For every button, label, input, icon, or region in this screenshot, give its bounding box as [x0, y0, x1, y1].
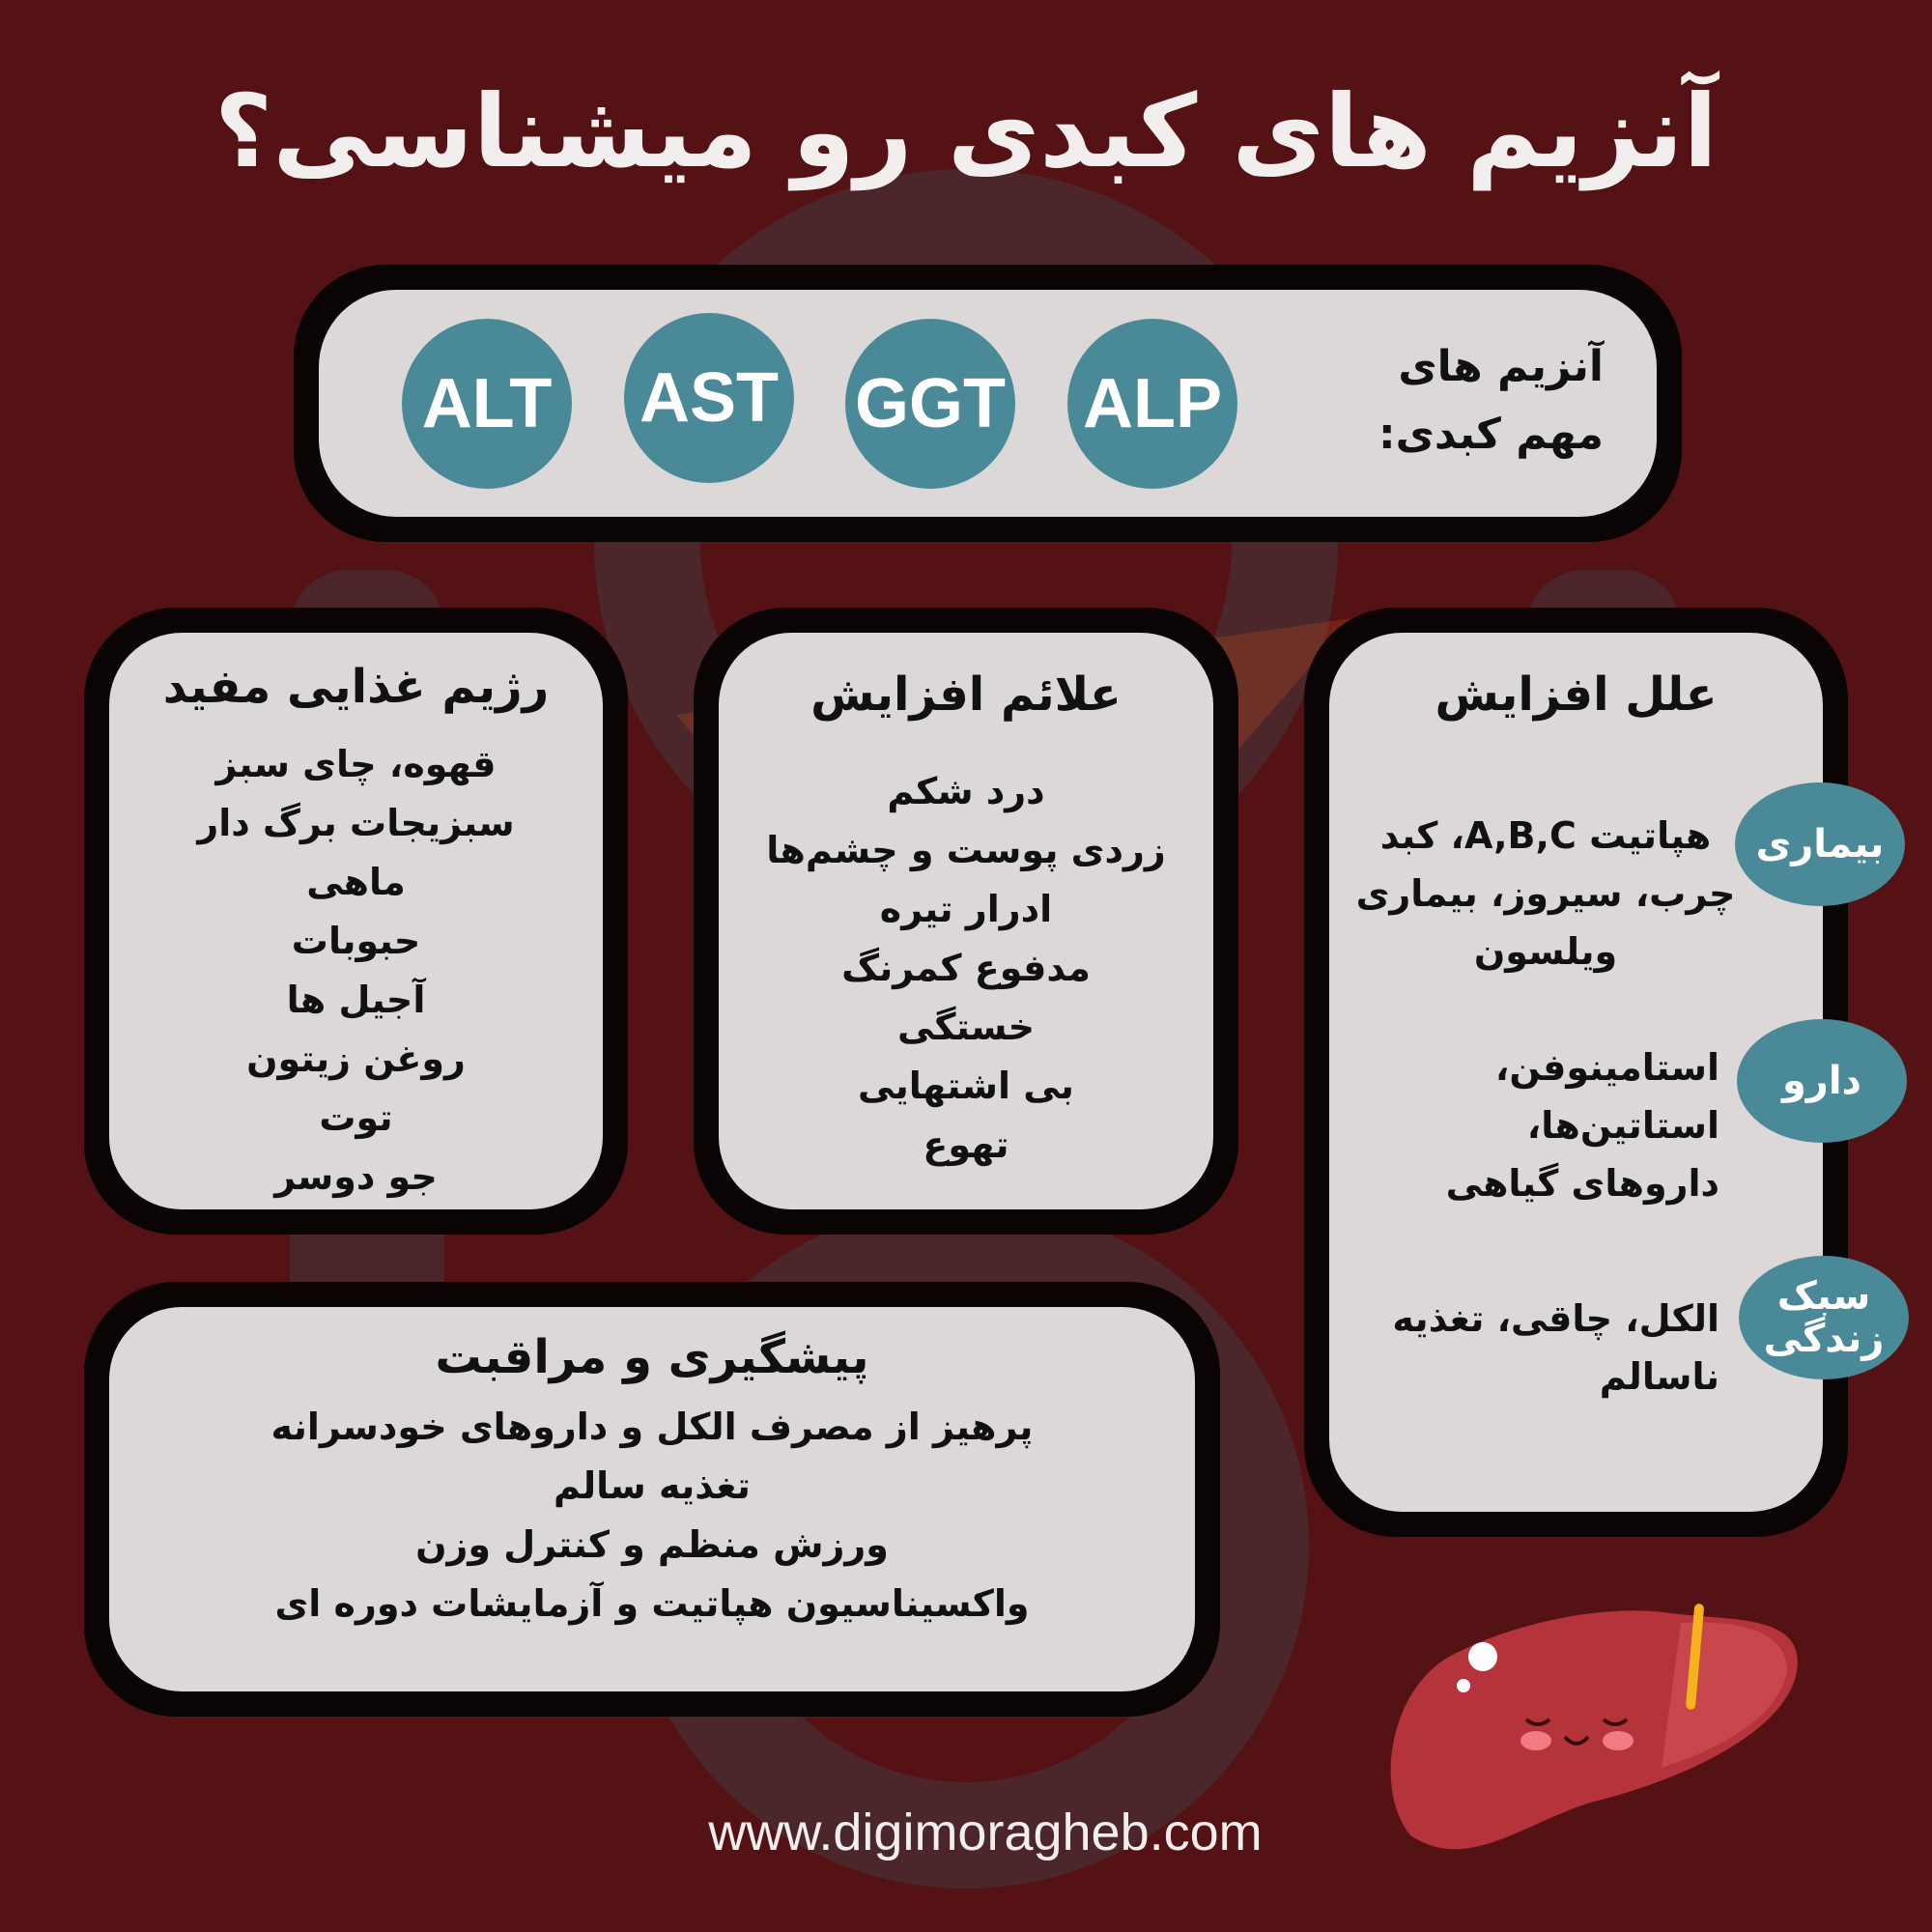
list: symptoms: تهوع: [923, 1123, 1009, 1166]
list: diet items: سبزیجات برگ دار: [197, 802, 515, 844]
circle: ALP: [1067, 319, 1237, 489]
list: diet items: حبوبات: [292, 920, 420, 962]
list: diet items: توت: [319, 1096, 393, 1139]
label: important enzymes: آنزیم های: [1398, 342, 1604, 391]
pill: drug: دارو: [1782, 1059, 1861, 1103]
website url: www.digimoragheb.com: [708, 1804, 1263, 1861]
list: diet items: [195, 743, 515, 1198]
panel: healthy diet: [84, 608, 628, 1235]
text: disease causes: [1356, 814, 1735, 974]
circle: AST: [624, 313, 794, 483]
pill: drug: [1737, 1019, 1907, 1143]
circle: GGT: [845, 319, 1015, 489]
heading: causes: علل افزایش: [1435, 668, 1718, 722]
circle: ALT: ALT: [422, 365, 552, 442]
text: lifestyle causes: [1392, 1297, 1719, 1399]
pill: disease: [1735, 782, 1905, 906]
panel: prevention: [84, 1282, 1220, 1717]
panel: key enzymes: [294, 265, 1682, 542]
list: diet items: قهوه، چای سبز: [215, 743, 497, 785]
heading: diet: رژیم غذایی مفید: [163, 660, 549, 714]
circle: ALT: [402, 319, 572, 489]
list: prevention items: ورزش منظم و کنترل وزن: [415, 1523, 889, 1566]
icon: liver mascot: [1391, 1604, 1798, 1849]
text: disease causes: ویلسون: [1474, 930, 1617, 973]
title: آنزیم های کبدی رو میشناسی؟: [214, 72, 1718, 190]
text: lifestyle causes: الکل، چاقی، تغذیه: [1392, 1297, 1719, 1340]
label: important enzymes: مهم کبدی:: [1378, 410, 1604, 459]
text: drug causes: استاتین‌ها،: [1527, 1104, 1719, 1147]
pill: lifestyle: [1739, 1256, 1909, 1379]
pill: disease: بیماری: [1756, 822, 1884, 867]
list: diet items: آجیل ها: [287, 979, 425, 1021]
pill: lifestyle: سبک: [1777, 1274, 1870, 1319]
pill: lifestyle: زندگی: [1764, 1317, 1884, 1361]
label: important enzymes: [1378, 340, 1605, 459]
list: symptoms: [766, 770, 1166, 1167]
heading: prevention: پیشگیری و مراقبت: [436, 1330, 868, 1384]
text: drug causes: [1446, 1046, 1719, 1206]
text: drug causes: داروهای گیاهی: [1446, 1162, 1719, 1205]
list: prevention items: پرهیز از مصرف الکل و داروهای خودسرانه: [271, 1406, 1033, 1448]
list: prevention items: واکسیناسیون هپاتیت و آزمایشات دوره ای: [274, 1582, 1030, 1625]
list: symptoms: مدفوع کمرنگ: [841, 947, 1091, 989]
circle: GGT: GGT: [855, 365, 1006, 442]
text: drug causes: استامینوفن،: [1495, 1046, 1719, 1089]
heading: symptoms: علائم افزایش: [810, 668, 1122, 722]
circle: AST: AST: [639, 359, 779, 437]
list: diet items: ماهی: [306, 861, 406, 903]
panel: causes: [1304, 608, 1848, 1537]
list: symptoms: زردی پوست و چشم‌ها: [766, 829, 1166, 871]
text: lifestyle causes: ناسالم: [1600, 1355, 1719, 1398]
circle: ALP: ALP: [1083, 365, 1222, 442]
list: symptoms: ادرار تیره: [880, 888, 1052, 930]
panel: symptoms: [694, 608, 1238, 1235]
list: symptoms: خستگی: [897, 1006, 1035, 1048]
list: symptoms: درد شکم: [887, 770, 1045, 812]
list: symptoms: بی اشتهایی: [858, 1065, 1074, 1107]
list: prevention items: تغذیه سالم: [554, 1464, 751, 1507]
list: diet items: جو دوسر: [274, 1155, 438, 1198]
text: disease causes: چرب، سیروز، بیماری: [1356, 872, 1735, 915]
list: diet items: روغن زیتون: [246, 1037, 466, 1080]
list: prevention items: [271, 1406, 1033, 1625]
text: disease causes: هپاتیت A,B,C، کبد: [1380, 814, 1711, 857]
